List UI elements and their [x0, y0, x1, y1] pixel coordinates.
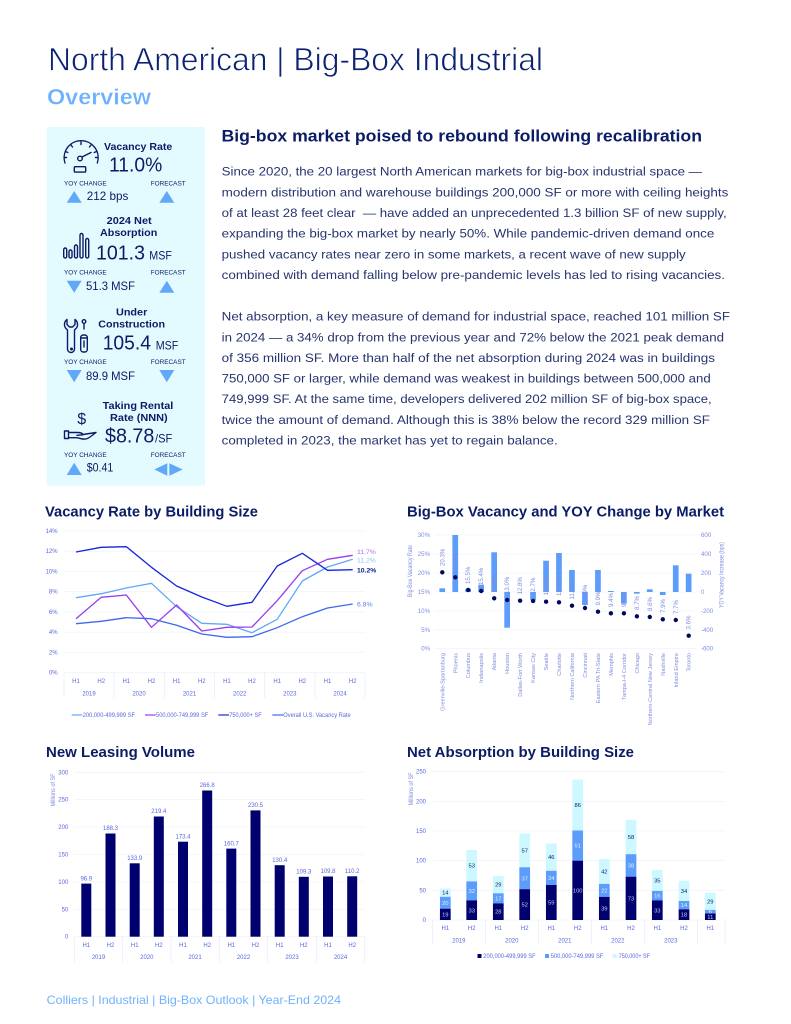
- metric: taking rental rate: $0.41: [87, 461, 114, 475]
- line chart: vacancy rate by building size: H1: [324, 679, 332, 685]
- line chart: vacancy rate by building size: H1: [72, 679, 80, 685]
- bar chart: new leasing volume: H2: [203, 943, 212, 949]
- bar chart: new leasing volume: [50, 770, 365, 962]
- stacked bar chart: net absorption: 57: [521, 848, 528, 854]
- vacancy value labels: 9.9%: [595, 591, 602, 606]
- icon: up arrow: [67, 463, 82, 475]
- icon: forecast flat arrows: [154, 463, 183, 476]
- bar values: 230.5: [248, 803, 264, 809]
- stacked bar chart: net absorption: 53: [468, 864, 475, 870]
- legend: 200,000-499,999 SF: [83, 713, 135, 719]
- vacancy value labels: 7.9%: [660, 599, 667, 613]
- stacked bar chart: net absorption: 29: [495, 883, 502, 889]
- icon: forecast down arrow: [159, 370, 174, 382]
- segment values: 39: [601, 906, 608, 912]
- bar values: 219.4: [151, 809, 167, 815]
- series: 750,000+ SF: [76, 547, 353, 606]
- axis title right: YOY Vacancy Increase (bps): [719, 542, 726, 608]
- heading: article: Big-box market poised to rebound following recalibration: [222, 127, 702, 146]
- vacancy value labels: 8.6%: [647, 597, 654, 611]
- bar chart: new leasing volume: H2: [252, 943, 260, 949]
- vacancy value labels: 3.6%: [686, 615, 693, 630]
- stacked bar chart: net absorption: 0: [423, 918, 427, 924]
- metric: vacancy rate: FORECAST: [151, 181, 186, 188]
- line chart: vacancy rate by building size: 0%: [49, 671, 58, 677]
- text block: paragraph 1: [222, 165, 728, 282]
- line chart: vacancy rate by building size: 2021: [183, 692, 197, 698]
- series: 200,000-499,999 SF: [76, 559, 353, 633]
- bar values: 173.4: [175, 834, 191, 840]
- stacked bar chart: net absorption: 20: [442, 901, 449, 907]
- segment values: 33: [654, 908, 661, 914]
- legend: [478, 954, 650, 960]
- text block: paragraph 1: combined with demand falling below pre-pandemic levels has led to rising vacancies.: [222, 268, 725, 282]
- bar chart: new leasing volume: H1: [227, 943, 236, 949]
- combo chart: vacancy and YOY change by market: 15%: [418, 589, 431, 596]
- metric: 2024 net absorption: 101.3: [96, 242, 145, 264]
- metric: 2024 net absorption: 2024 Net: [107, 216, 152, 227]
- combo chart: vacancy and YOY change by market: 0: [701, 589, 705, 596]
- icon: wrench and screwdriver: [64, 320, 87, 352]
- vacancy value labels: 12.7%: [530, 577, 537, 595]
- metric: under construction: [64, 307, 186, 383]
- stacked bar chart: net absorption: H1: [494, 926, 503, 932]
- metric: 2024 net absorption: FORECAST: [151, 270, 186, 277]
- vacancy value labels: 13.0%: [504, 576, 511, 594]
- text block: paragraph 2: twice the amount of demand. Although this is 38% below the record 329 million SF: [222, 413, 710, 427]
- bar chart: new leasing volume: 200: [58, 825, 69, 831]
- vacancy value labels: 12.4%: [556, 578, 563, 596]
- stacked bar chart: net absorption: H2: [521, 926, 529, 932]
- line chart: vacancy rate by building size: 10%: [46, 570, 58, 576]
- title: North American | Big-Box Industrial: [48, 42, 543, 78]
- bar chart: new leasing volume: H1: [179, 943, 187, 949]
- line chart: vacancy rate by building size: H2: [148, 679, 156, 685]
- text block: paragraph 2: 749,999 SF. At the same time, developers delivered 202 million SF of big-box space,: [222, 392, 712, 406]
- legend: 500,000-749,999 SF: [156, 713, 209, 719]
- metric: taking rental rate: [64, 401, 186, 476]
- bar chart: new leasing volume: H2: [300, 943, 308, 949]
- line chart: vacancy rate by building size: 14%: [46, 529, 58, 535]
- bars: [81, 790, 357, 937]
- panel: key metrics sidebar: [47, 127, 205, 486]
- bar chart: new leasing volume: H1: [324, 943, 332, 949]
- line chart: vacancy rate by building size: [46, 529, 376, 719]
- market labels: Seattle: [544, 653, 550, 670]
- bar chart: new leasing volume: H2: [155, 943, 163, 949]
- icon: bar columns: [64, 234, 89, 258]
- stacked bar chart: net absorption: 34: [681, 889, 688, 895]
- text block: paragraph 1: of at least 28 feet clear — have added an unprecedented 1.3 billion SF of new supply,: [222, 206, 727, 220]
- bar values: 266.8: [200, 783, 215, 789]
- stacked bar chart: net absorption: 35: [654, 878, 661, 884]
- combo chart: vacancy and YOY change by market: 30%: [418, 532, 431, 539]
- stacked bar chart: net absorption: 38: [628, 864, 634, 870]
- vacancy value labels: 12.5%: [543, 578, 550, 596]
- market labels: Inland Empire: [674, 653, 680, 688]
- combo chart: vacancy and YOY change by market: -200: [701, 608, 714, 615]
- metric: taking rental rate: $8.78: [105, 426, 154, 448]
- stacked bar chart: net absorption: 46: [548, 855, 555, 861]
- stacked bar chart: net absorption: H2: [468, 926, 476, 932]
- line chart: vacancy rate by building size: 2023: [283, 692, 297, 698]
- metric: under construction: FORECAST: [151, 359, 186, 366]
- vacancy value labels: [439, 548, 693, 630]
- line chart: vacancy rate by building size: H2: [97, 679, 106, 685]
- text block: paragraph 2: [222, 310, 730, 448]
- legend: Overall U.S. Vacancy Rate: [283, 713, 351, 719]
- text block: paragraph 2: Net absorption, a key measure of demand for industrial space, reached 101 million SF: [222, 310, 730, 324]
- bar values: 133.9: [127, 856, 143, 862]
- stacked bar chart: net absorption: 32: [468, 889, 475, 895]
- stacked bar chart: net absorption: H2: [680, 926, 688, 932]
- line chart: vacancy rate by building size: H1: [122, 679, 131, 685]
- stacked bar chart: net absorption: [408, 770, 725, 960]
- market labels: Charlotte: [557, 653, 563, 676]
- line chart: vacancy rate by building size: H2: [198, 679, 206, 685]
- line chart: vacancy rate by building size: 4%: [49, 630, 58, 636]
- market labels: Memphis: [609, 653, 615, 676]
- bar chart: new leasing volume: H1: [131, 943, 139, 949]
- market labels: Northern-Central New Jersey: [648, 653, 654, 725]
- end labels: 6.8%: [357, 602, 372, 609]
- market labels: Cincinnati: [583, 653, 589, 678]
- metric: taking rental rate: YOY CHANGE: [64, 452, 107, 459]
- metric: under construction: MSF: [156, 338, 178, 352]
- bar chart: new leasing volume: H2: [348, 943, 357, 949]
- metric: 2024 net absorption: MSF: [149, 248, 172, 262]
- stacked bar chart: net absorption: 24: [548, 876, 555, 882]
- line chart: vacancy rate by building size: H2: [248, 679, 256, 685]
- combo chart: vacancy and YOY change by market: [407, 532, 726, 725]
- icon: down arrow: [67, 370, 82, 382]
- metric: taking rental rate: /SF: [155, 432, 172, 446]
- bar chart: new leasing volume: 0: [65, 935, 69, 941]
- line chart: vacancy rate by building size: 2024: [333, 692, 347, 698]
- segment values: 73: [628, 896, 634, 902]
- combo chart: vacancy and YOY change by market: 25%: [418, 551, 431, 558]
- combo chart: vacancy and YOY change by market: -400: [701, 627, 714, 634]
- text block: paragraph 2: 750,000 SF or larger, while demand was weakest in buildings between 500,000 and: [222, 372, 711, 386]
- segment values: 18: [681, 913, 687, 919]
- stacked bar chart: net absorption: 150: [416, 829, 427, 835]
- vacancy value labels: 20.3%: [439, 548, 446, 566]
- footer: Colliers | Industrial | Big-Box Outlook | Year-End 2024: [47, 993, 341, 1007]
- series: overall U.S. vacancy rate: [76, 604, 353, 637]
- stacked bar chart: net absorption: 14: [442, 891, 449, 897]
- bar chart: new leasing volume: 50: [62, 907, 69, 913]
- stacked bar chart: net absorption: 14: [681, 903, 688, 909]
- segment values: [442, 888, 713, 921]
- bar values: 109.8: [320, 869, 336, 875]
- vacancy value labels: 15.4%: [478, 567, 485, 585]
- market labels: Northern California: [570, 652, 576, 700]
- end labels: 11.2%: [357, 558, 376, 564]
- bar values: [80, 783, 360, 882]
- line chart: vacancy rate by building size: H1: [173, 679, 181, 685]
- stacked bar chart: net absorption: H2: [574, 926, 582, 932]
- text block: paragraph 2: completed in 2023, the market has yet to regain balance.: [222, 434, 558, 448]
- combo chart: vacancy and YOY change by market: 20%: [418, 570, 431, 577]
- bar chart: new leasing volume: H1: [276, 943, 284, 949]
- vacancy value labels: 11.5%: [569, 582, 576, 600]
- bar values: 188.3: [103, 826, 119, 832]
- vacancy value labels: 18.9%: [452, 553, 459, 571]
- axis title: Millions of SF: [408, 772, 415, 806]
- market labels: Indianapolis: [479, 653, 485, 683]
- metric: under construction: 105.4: [103, 332, 151, 354]
- metric: under construction: 89.9 MSF: [86, 369, 135, 383]
- bar chart: new leasing volume: 2024: [334, 955, 348, 961]
- vacancy value labels: 15.5%: [465, 566, 472, 584]
- icon: down arrow: [67, 281, 82, 293]
- stacked bar chart: net absorption: 22: [601, 888, 608, 894]
- axis title left: Big-Box Vacancy Rate: [407, 544, 414, 597]
- metric: under construction: Under: [116, 307, 147, 318]
- combo chart: vacancy and YOY change by market: 200: [701, 570, 712, 577]
- bar chart: new leasing volume: H1: [82, 943, 91, 949]
- stacked bar chart: net absorption: 50: [419, 888, 427, 894]
- vacancy value labels: 7.7%: [673, 600, 680, 614]
- stacked bar chart: net absorption: H1: [600, 926, 609, 932]
- stacked bar chart: net absorption: 2021: [558, 938, 572, 944]
- combo chart: vacancy and YOY change by market: 400: [701, 551, 712, 558]
- stacked bar chart: net absorption: 17: [495, 896, 502, 902]
- line chart: vacancy rate by building size: 8%: [49, 590, 58, 596]
- market labels: Eastern PA Tri-State: [596, 653, 602, 703]
- vacancy value labels: 12.8%: [517, 577, 524, 594]
- metric: vacancy rate: YOY CHANGE: [64, 181, 107, 188]
- stacked bar chart: net absorption: 200: [416, 799, 427, 805]
- bar chart: new leasing volume: 2022: [237, 955, 251, 961]
- market labels: Tampa-I-4 Corridor: [622, 653, 628, 700]
- vacancy value labels: 8.7%: [634, 596, 641, 610]
- metric: taking rental rate: Rate (NNN): [110, 413, 168, 424]
- combo chart: vacancy and YOY change by market: 5%: [421, 627, 431, 634]
- text block: paragraph 1: expanding the big-box market by nearly 50%. While pandemic-driven demand once: [222, 227, 714, 241]
- vacancy value labels: 10.9%: [582, 584, 589, 602]
- line chart: vacancy rate by building size: 2%: [49, 650, 58, 656]
- end labels: 10.2%: [357, 568, 376, 574]
- bar chart: new leasing volume: 300: [58, 770, 69, 776]
- market labels: Chicago: [635, 653, 641, 674]
- segment values: 19: [442, 912, 449, 918]
- text block: paragraph 1: pushed vacancy rates near zero in some markets, a recent wave of new supply: [222, 247, 687, 261]
- bar chart: new leasing volume: 2021: [188, 955, 202, 961]
- text block: paragraph 1: modern distribution and warehouse buildings 200,000 SF or more with ceiling heights: [222, 185, 728, 199]
- market labels: Toronto: [687, 653, 693, 672]
- text block: paragraph 2: in 2024 — a 34% drop from the previous year and 72% below the 2021 peak demand: [222, 330, 724, 344]
- line chart: vacancy rate by building size: 12%: [46, 549, 58, 555]
- bar values: 130.4: [272, 858, 288, 864]
- end labels: [357, 549, 376, 609]
- stacked bar chart: net absorption: 2019: [452, 938, 466, 944]
- stacked bar chart: net absorption: 42: [601, 870, 608, 876]
- segment values: 11: [707, 915, 713, 921]
- line chart: vacancy rate by building size: H1: [273, 679, 282, 685]
- segment values: 28: [495, 910, 502, 916]
- stacked bar chart: net absorption: H1: [547, 926, 556, 932]
- line chart: vacancy rate by building size: 2020: [132, 692, 146, 698]
- metric: 2024 net absorption: 51.3 MSF: [86, 279, 135, 293]
- vacancy dots: [440, 570, 691, 638]
- combo chart: vacancy and YOY change by market: -600: [701, 646, 714, 653]
- vacancy value labels: 9.4%: [621, 593, 628, 607]
- stacked bar chart: net absorption: H1: [441, 926, 450, 932]
- line chart: vacancy rate by building size: H2: [349, 679, 357, 685]
- legend: [72, 713, 351, 719]
- bar values: 96.9: [80, 876, 93, 882]
- legend: 750,000+ SF: [229, 713, 262, 719]
- combo chart: vacancy and YOY change by market: 10%: [418, 608, 431, 615]
- bars: 200,000-499,999 SF: [440, 861, 716, 920]
- metric: 2024 net absorption: [64, 216, 186, 293]
- axis title: Millions of SF: [50, 773, 57, 806]
- bars: 500,000-749,999 SF: [440, 830, 716, 914]
- metric: vacancy rate: Vacancy Rate: [104, 142, 173, 153]
- market labels: Kansas City: [531, 653, 537, 683]
- stacked bar chart: net absorption: 6: [709, 910, 712, 916]
- stacked bar chart: net absorption: 2023: [664, 938, 678, 944]
- market labels: Houston: [505, 653, 511, 674]
- combo chart: vacancy and YOY change by market: 600: [701, 532, 712, 539]
- metric: taking rental rate: Taking Rental: [103, 401, 174, 412]
- chart heading: vacancy rate: Vacancy Rate by Building Size: [45, 505, 258, 521]
- bar chart: new leasing volume: 100: [58, 880, 69, 886]
- icon: forecast up arrow: [159, 191, 174, 203]
- stacked bar chart: net absorption: 16: [654, 894, 661, 900]
- bar chart: new leasing volume: H2: [107, 943, 115, 949]
- metric: 2024 net absorption: Absorption: [100, 228, 157, 239]
- stacked bar chart: net absorption: H1: [653, 926, 662, 932]
- bar chart: new leasing volume: 2019: [92, 955, 106, 961]
- icon: speedometer gauge: [64, 141, 98, 172]
- stacked bar chart: net absorption: 100: [416, 859, 427, 865]
- icon: hand holding dollar: $: [77, 411, 86, 428]
- market labels: Greenville-Spartanburg: [440, 653, 446, 711]
- chart heading: net absorption: Net Absorption by Building Size: [407, 745, 634, 761]
- stacked bar chart: net absorption: 86: [574, 803, 581, 809]
- market labels: Columbus: [466, 653, 472, 678]
- bar chart: new leasing volume: 2020: [140, 955, 154, 961]
- bar values: 109.3: [296, 870, 312, 876]
- metric: vacancy rate: [64, 141, 186, 203]
- line chart: vacancy rate by building size: H2: [298, 679, 307, 685]
- segment values: 52: [521, 903, 528, 909]
- vacancy value labels: 9.4%: [608, 593, 615, 607]
- market labels: Dallas-Fort Worth: [518, 653, 524, 697]
- stacked bar chart: net absorption: H2: [627, 926, 635, 932]
- line chart: vacancy rate by building size: H1: [223, 679, 231, 685]
- segment values: 100: [573, 888, 583, 894]
- line chart: vacancy rate by building size: 2019: [82, 692, 96, 698]
- bar values: 160.7: [224, 841, 239, 847]
- line chart: vacancy rate by building size: 6%: [49, 610, 58, 616]
- line chart: vacancy rate by building size: 2022: [233, 692, 247, 698]
- text block: paragraph 1: Since 2020, the 20 largest North American markets for big-box industrial space —: [222, 165, 703, 179]
- stacked bar chart: net absorption: 2020: [505, 938, 519, 944]
- segment values: 33: [468, 908, 475, 914]
- icon: forecast up arrow: [159, 281, 174, 293]
- bar values: 110.2: [345, 869, 360, 875]
- end labels: 11.7%: [357, 549, 376, 556]
- market labels: Nashville: [661, 653, 667, 676]
- bar chart: new leasing volume: 2023: [285, 955, 299, 961]
- chart heading: vacancy and YOY change: Big-Box Vacancy and YOY Change by Market: [407, 505, 724, 521]
- stacked bar chart: net absorption: 51: [574, 844, 581, 850]
- legend: 200,000-499,999 SF: [483, 954, 536, 960]
- chart heading: new leasing volume: New Leasing Volume: [46, 745, 195, 761]
- text block: paragraph 2: of 356 million SF. More than half of the net absorption during 2024 was in buildings: [222, 351, 715, 365]
- bars: 750,000+ SF: [440, 780, 716, 910]
- stacked bar chart: net absorption: 37: [521, 876, 528, 882]
- stacked bar chart: net absorption: 29: [707, 899, 714, 905]
- segment values: 59: [548, 900, 555, 906]
- market labels: Phoenix: [453, 653, 459, 673]
- legend: 500,000-749,999 SF: [551, 954, 604, 960]
- legend: 750,000+ SF: [619, 954, 650, 960]
- metric: vacancy rate: 11.0%: [109, 155, 162, 177]
- stacked bar chart: net absorption: 250: [416, 770, 427, 776]
- metric: 2024 net absorption: YOY CHANGE: [64, 270, 107, 277]
- stacked bar chart: net absorption: 58: [628, 835, 634, 841]
- combo chart: vacancy and YOY change by market: 0%: [421, 646, 431, 653]
- stacked bar chart: net absorption: H1: [706, 926, 715, 932]
- stacked bar chart: net absorption: 2022: [611, 938, 625, 944]
- bar chart: new leasing volume: 250: [58, 798, 69, 804]
- icon: up arrow: [67, 191, 82, 203]
- market labels: [440, 652, 693, 725]
- metric: under construction: YOY CHANGE: [64, 359, 107, 366]
- metric: vacancy rate: 212 bps: [87, 189, 128, 203]
- market labels: Atlanta: [492, 652, 498, 670]
- metric: under construction: Construction: [98, 319, 165, 330]
- bar chart: new leasing volume: 150: [58, 852, 69, 858]
- YOY change bars: [439, 535, 692, 628]
- metric: taking rental rate: FORECAST: [151, 452, 186, 459]
- series: 500,000-749,999 SF: [76, 555, 353, 631]
- subtitle: overview: Overview: [47, 84, 152, 109]
- vacancy value labels: 13.6%: [491, 574, 498, 592]
